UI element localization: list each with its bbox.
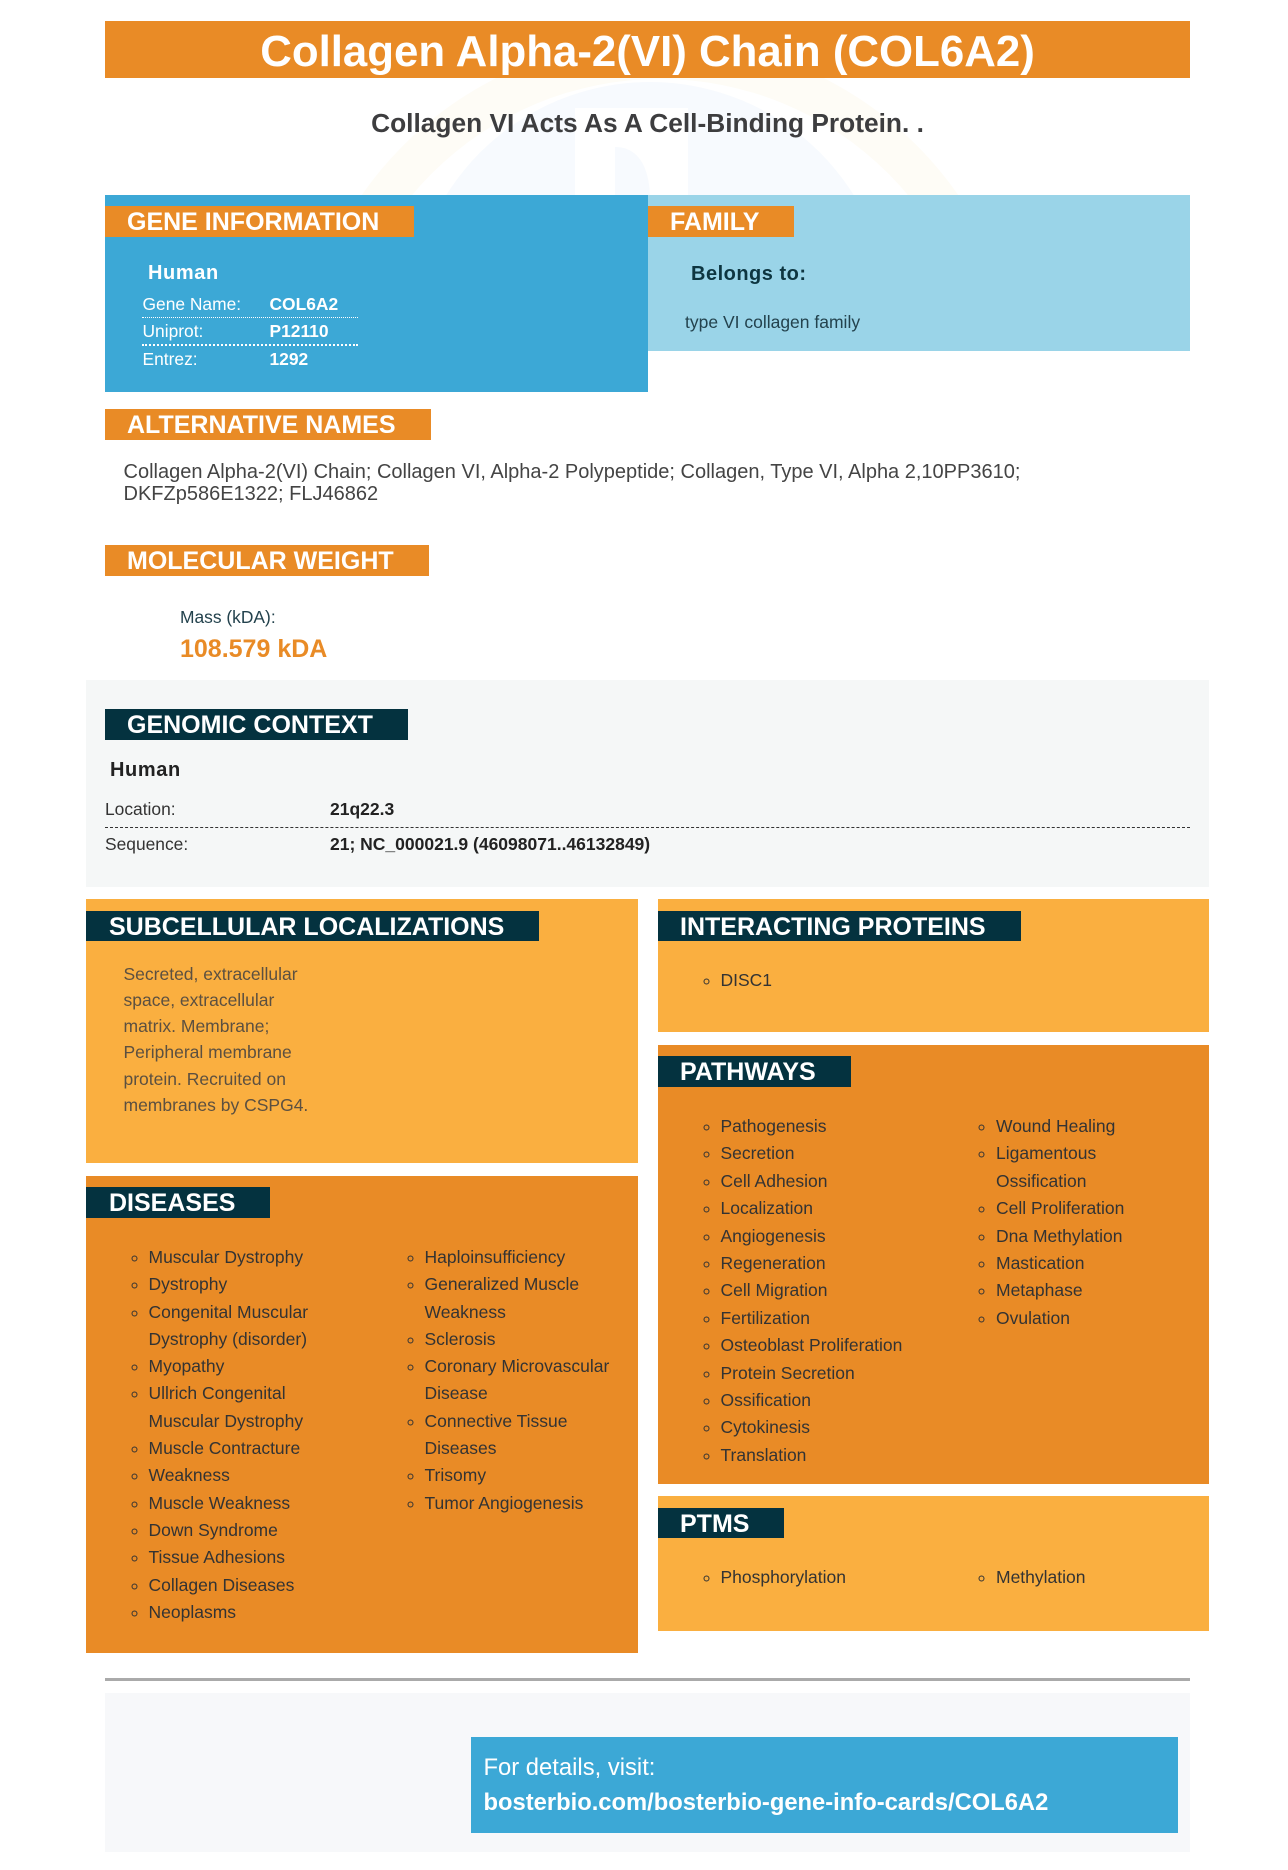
diseases list column 1: Down Syndrome xyxy=(148,1520,278,1540)
gene info table: 1292 xyxy=(270,349,308,369)
genomic sequence row: 21; NC_000021.9 (46098071..46132849) xyxy=(330,834,650,854)
gene species label: Human xyxy=(148,262,219,284)
heading: ptms xyxy=(658,1508,784,1538)
heading: gene information: GENE INFORMATION xyxy=(127,208,379,236)
genomic location row: Location: xyxy=(105,799,176,819)
subcellular localizations text: protein. Recruited on xyxy=(124,1069,286,1089)
callout: details link xyxy=(471,1737,1178,1833)
pathways list column 2: Ovulation xyxy=(996,1308,1070,1328)
diseases list column 1 xyxy=(132,1247,308,1622)
subcellular localizations text: space, extracellular xyxy=(124,990,274,1010)
pathways list column 2: Dna Methylation xyxy=(996,1226,1122,1246)
diseases list column 1: Myopathy xyxy=(148,1356,224,1376)
heading: pathways: PATHWAYS xyxy=(680,1058,816,1086)
diseases list column 1: Dystrophy (disorder) xyxy=(148,1329,307,1349)
gene info table: Gene Name: xyxy=(142,294,241,314)
callout: details link: bosterbio.com/bosterbio-gene-info-cards/COL6A2 xyxy=(484,1789,1048,1816)
panel: diseases xyxy=(86,1176,638,1653)
ptms list column 2: Methylation xyxy=(996,1566,1086,1586)
subcellular localizations text: membranes by CSPG4. xyxy=(124,1095,308,1115)
pathways list column 1: Cell Migration xyxy=(720,1280,827,1300)
panel: gene information xyxy=(105,195,648,392)
pathways list column 1: Fertilization xyxy=(720,1308,810,1328)
heading: ptms: PTMS xyxy=(680,1510,749,1538)
heading: pathways xyxy=(658,1056,851,1087)
diseases list column 1: Neoplasms xyxy=(148,1602,236,1622)
pathways list column 2: Mastication xyxy=(996,1253,1085,1273)
pathways list column 1: Regeneration xyxy=(720,1253,826,1273)
family value: type VI collagen family xyxy=(685,312,860,332)
pathways list column 1: Secretion xyxy=(720,1143,794,1163)
heading: molecular weight: MOLECULAR WEIGHT xyxy=(127,547,394,575)
panel: interacting proteins xyxy=(658,899,1209,1032)
pathways list column 2: Wound Healing xyxy=(996,1116,1115,1136)
gene info table: Uniprot: xyxy=(142,321,203,341)
pathways list column 1: Protein Secretion xyxy=(720,1363,855,1383)
callout: details link: For details, visit: xyxy=(484,1754,655,1781)
diseases list column 2: Disease xyxy=(424,1383,488,1403)
gene info table: Entrez: xyxy=(142,349,198,369)
gene info table: COL6A2 xyxy=(270,294,338,314)
gene info table: P12110 xyxy=(270,321,328,341)
diseases list column 2: Coronary Microvascular xyxy=(424,1356,609,1376)
genomic location row xyxy=(105,799,1190,828)
diseases list column 2: Trisomy xyxy=(424,1465,486,1485)
diseases list column 1: Muscular Dystrophy xyxy=(148,1411,303,1431)
diseases list column 1: Muscle Contracture xyxy=(148,1438,300,1458)
pathways list column 2: Cell Proliferation xyxy=(996,1198,1124,1218)
pathways list column 1: Angiogenesis xyxy=(720,1226,826,1246)
diseases list column 2: Tumor Angiogenesis xyxy=(424,1493,583,1513)
diseases list column 1: Tissue Adhesions xyxy=(148,1547,285,1567)
diseases list column 1: Congenital Muscular xyxy=(148,1302,308,1322)
genomic species label: Human xyxy=(110,759,181,781)
panel: subcellular localizations xyxy=(86,899,638,1163)
mass value: 108.579 kDA xyxy=(180,635,327,663)
diseases list column 1: Muscular Dystrophy xyxy=(148,1247,303,1267)
genomic location row: 21q22.3 xyxy=(330,799,394,819)
pathways list column 1: Localization xyxy=(720,1198,813,1218)
pathways list column 1 xyxy=(704,1116,902,1465)
pathways list column 2: Metaphase xyxy=(996,1280,1083,1300)
panel: family xyxy=(648,195,1190,351)
diseases list column 2 xyxy=(408,1247,610,1513)
mass label: Mass (kDA): xyxy=(180,607,276,627)
heading: diseases: DISEASES xyxy=(109,1189,235,1217)
background watermark arcs xyxy=(362,78,958,195)
pathways list column 1: Translation xyxy=(720,1445,806,1465)
subcellular localizations text xyxy=(124,964,308,1115)
alternative names text: DKFZp586E1322; FLJ46862 xyxy=(124,483,378,505)
pathways list column 1: Osteoblast Proliferation xyxy=(720,1335,902,1355)
family belongs to label: Belongs to: xyxy=(691,263,806,285)
diseases list column 2: Sclerosis xyxy=(424,1329,496,1349)
heading: alternative names: ALTERNATIVE NAMES xyxy=(127,411,396,439)
pathways list column 1: Pathogenesis xyxy=(720,1116,827,1136)
subcellular localizations text: matrix. Membrane; xyxy=(124,1016,269,1036)
diseases list column 1: Muscle Weakness xyxy=(148,1493,290,1513)
footer rule xyxy=(105,1678,1190,1681)
subtitle: Collagen VI Acts As A Cell-Binding Protein. . xyxy=(371,108,924,138)
genomic sequence row xyxy=(105,834,650,854)
pathways list column 2 xyxy=(978,1116,1124,1328)
heading: family: FAMILY xyxy=(670,208,759,236)
diseases list column 2: Generalized Muscle xyxy=(424,1274,579,1294)
pathways list column 1: Ossification xyxy=(720,1390,811,1410)
pathways list column 2: Ossification xyxy=(996,1171,1086,1191)
subcellular localizations text: Peripheral membrane xyxy=(124,1042,292,1062)
title banner xyxy=(105,21,1190,78)
subcellular localizations text: Secreted, extracellular xyxy=(124,964,298,984)
panel: pathways xyxy=(658,1045,1209,1484)
heading: diseases xyxy=(86,1187,270,1218)
alternative names text: Collagen Alpha-2(VI) Chain; Collagen VI, Alpha-2 Polypeptide; Collagen, Type VI, Alpha 2,10PP3610; xyxy=(124,461,1020,483)
diseases list column 1: Ullrich Congenital xyxy=(148,1383,286,1403)
diseases list column 1: Dystrophy xyxy=(148,1274,227,1294)
alternative names text xyxy=(124,461,1020,505)
gene info table xyxy=(142,294,358,369)
heading: genomic context: GENOMIC CONTEXT xyxy=(127,711,373,739)
panel: ptms xyxy=(658,1496,1209,1631)
diseases list column 2: Weakness xyxy=(424,1302,506,1322)
diseases list column 2: Connective Tissue xyxy=(424,1411,568,1431)
interacting proteins list: DISC1 xyxy=(720,970,772,990)
ptms list column 1: Phosphorylation xyxy=(720,1566,846,1586)
heading: interacting proteins: INTERACTING PROTEINS xyxy=(680,913,986,941)
diseases list column 2: Haploinsufficiency xyxy=(424,1247,565,1267)
pathways list column 1: Cytokinesis xyxy=(720,1417,810,1437)
panel: genomic context xyxy=(86,680,1209,887)
pathways list column 2: Ligamentous xyxy=(996,1143,1096,1163)
pathways list column 1: Cell Adhesion xyxy=(720,1171,828,1191)
diseases list column 1: Weakness xyxy=(148,1465,230,1485)
title: Collagen Alpha-2(VI) Chain (COL6A2) xyxy=(260,27,1035,76)
heading: family xyxy=(648,206,794,237)
heading: subcellular localizations: SUBCELLULAR LOCALIZATIONS xyxy=(109,913,504,941)
diseases list column 2: Diseases xyxy=(424,1438,496,1458)
panel: footer xyxy=(105,1693,1190,1852)
diseases list column 1: Collagen Diseases xyxy=(148,1575,294,1595)
genomic sequence row: Sequence: xyxy=(105,834,188,854)
